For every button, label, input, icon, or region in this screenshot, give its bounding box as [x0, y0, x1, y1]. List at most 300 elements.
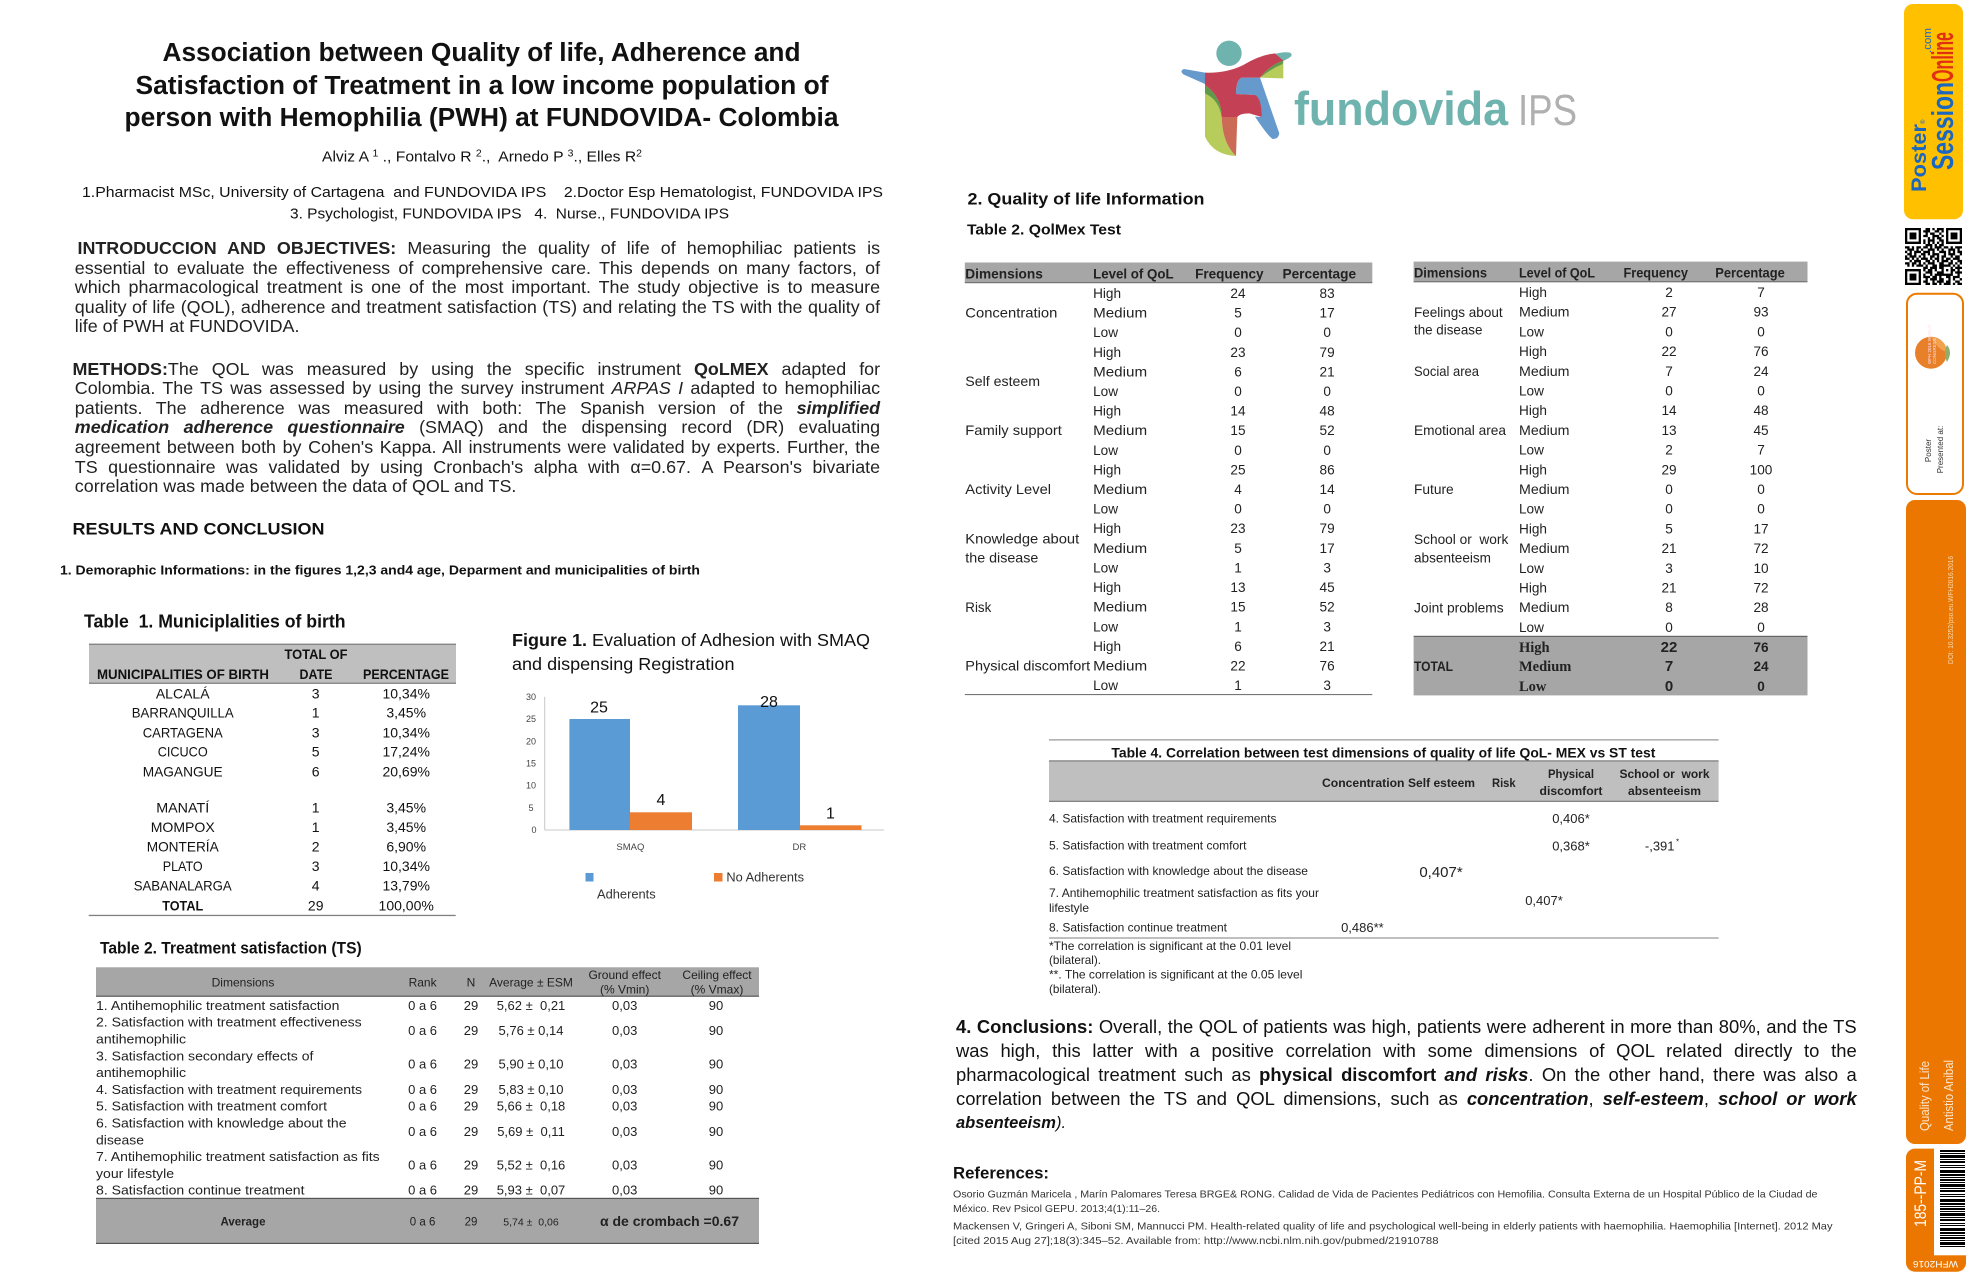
table 4 rows: 0,407* [1525, 893, 1563, 908]
row group: Knowledge about the disease: 23 [1230, 521, 1246, 536]
left table header: Frequency [1195, 266, 1264, 281]
table 2 row values: 5,66 ± 0,18 [497, 1098, 565, 1113]
row group: Future: Medium [1519, 482, 1570, 497]
logo figure [1181, 41, 1292, 156]
table 1 rows: 1 [312, 704, 320, 720]
row group: School or work absenteeism: 21 [1661, 541, 1677, 556]
table 2 row values: 5,52 ± 0,16 [497, 1158, 565, 1173]
row group: Family support [965, 404, 1335, 458]
text block: conclusions: 4. Conclusions: Overall, the QOL of patients was high, patients were adherent in more than 80%, and the TS [956, 1016, 1857, 1037]
table 2 row values: 29 [464, 1182, 478, 1197]
row group: School or work absenteeism: 3 [1665, 561, 1673, 576]
table 2 row values: 29 [464, 1023, 478, 1038]
table 2 row values: 5,62 ± 0,21 [497, 998, 565, 1013]
table 2 average band: α de crombach =0.67 [600, 1214, 739, 1229]
authors: ., Elles R [573, 148, 636, 166]
row group: Knowledge about the disease: 3 [1323, 561, 1331, 576]
total band: 22 [1661, 639, 1677, 656]
row group: Physical discomfort: 6 [1234, 639, 1242, 654]
panel: QoL table right [1414, 262, 1808, 695]
heading: results and conclusion: RESULTS AND CONCLUSION [72, 520, 324, 538]
table 1 header band: DATE [300, 666, 332, 682]
table 4 rows: 4. Satisfaction with treatment requirements [1049, 811, 1276, 825]
sidebar: presented at box [1907, 294, 1963, 494]
row group: Self esteem: 0 [1323, 384, 1331, 399]
total band: Low [1519, 679, 1547, 695]
row group: Family support: High [1093, 404, 1121, 419]
bar value labels: 28 [760, 694, 778, 711]
row group: Risk: Low [1093, 619, 1118, 634]
table 1 rows: 2 [312, 838, 320, 854]
row group: Joint problems: 0 [1757, 620, 1765, 635]
table 2 row values: 90 [709, 1098, 723, 1113]
table 2 header: (% Vmax) [691, 982, 743, 996]
row group: Future: 0 [1665, 482, 1673, 497]
row group: Concentration: 5 [1234, 306, 1242, 321]
left table header [965, 262, 1372, 283]
table 1 rows: PLATO [163, 858, 203, 874]
text block: methods: agreement between both by Cohen's Kappa. All instruments were validated by experts. Further, the [75, 437, 880, 457]
row group: Risk: High [1093, 580, 1121, 595]
row group: Self esteem: 0 [1234, 384, 1242, 399]
table 1 rows: MAGANGUE [143, 763, 223, 779]
row group: Concentration: 17 [1320, 306, 1335, 321]
row group: Emotional area: 45 [1753, 423, 1769, 438]
total band: Medium [1519, 659, 1571, 675]
sidebar: poster id and barcode: 185--PP-M [1911, 1160, 1930, 1227]
table 4 header: Physical [1548, 767, 1594, 781]
row group: School or work absenteeism: 72 [1753, 541, 1769, 556]
row group: Risk: 3 [1323, 619, 1331, 634]
row group: Physical discomfort: 1 [1234, 678, 1242, 693]
row group: Emotional area: Medium [1519, 423, 1570, 438]
row group: Joint problems: 0 [1665, 620, 1673, 635]
bar value labels: 25 [590, 700, 608, 716]
row group: Feelings about the disease: 2 [1665, 285, 1673, 300]
table 2 row values: 0 a 6 [408, 1182, 437, 1197]
row group: Emotional area: Emotional area [1414, 423, 1506, 438]
total band: High [1519, 640, 1550, 656]
figure 1 heading [512, 630, 870, 674]
table 1 rows: 100,00% [379, 897, 434, 913]
y axis labels: 5 [528, 803, 534, 813]
total band [1414, 636, 1808, 695]
affiliations [82, 184, 883, 222]
table 2 average band: 29 [465, 1216, 477, 1228]
table 1 rows: 20,69% [382, 763, 430, 779]
row group: Knowledge about the disease: Knowledge about [965, 532, 1079, 547]
table 1 rows: 6 [312, 763, 320, 779]
row group: Knowledge about the disease [965, 521, 1335, 576]
table 2 row values: 0 a 6 [408, 1158, 437, 1173]
references heading: References: [953, 1164, 1049, 1182]
row group: Joint problems: Medium [1519, 600, 1570, 615]
row group: School or work absenteeism: 10 [1753, 561, 1769, 576]
category labels: DR [793, 842, 806, 853]
table 2 row values: 0,03 [612, 1182, 637, 1197]
table 2 header [96, 967, 759, 997]
table 2 row values: 0,03 [612, 1124, 637, 1139]
table 2 row values: 5,69 ± 0,11 [497, 1124, 565, 1139]
row group: Self esteem: 21 [1320, 364, 1335, 379]
row group: Knowledge about the disease: High [1093, 521, 1121, 536]
table 1 rows: 10,34% [382, 685, 430, 701]
table 4 footnotes: (bilateral). [1049, 953, 1101, 967]
table 1 rows: 17,24% [382, 743, 430, 759]
row group: Activity Level: 4 [1234, 482, 1242, 497]
category labels: SMAQ [616, 842, 644, 853]
row group: Emotional area: 2 [1665, 443, 1673, 458]
authors: 2 [636, 148, 642, 160]
bar value labels: 4 [657, 792, 666, 809]
table 2 row values: 0 a 6 [408, 1124, 437, 1139]
text block: methods: Colombia. The TS was assessed by using the survey instrument ARPAS I adapted to hemophiliac [75, 378, 880, 398]
table 2 average band: 0 a 6 [410, 1216, 435, 1228]
sidebar: PosterSessionOnline banner: .com [1922, 28, 1934, 53]
title [124, 39, 839, 132]
logo wordmark: fundovida [1294, 82, 1509, 135]
row group: Future: 29 [1661, 462, 1677, 477]
table 4 rows: * [1676, 837, 1679, 846]
row group: Future: 0 [1757, 502, 1765, 517]
row group: Emotional area [1414, 403, 1769, 458]
row group: Social area: 0 [1757, 384, 1765, 399]
row group: Concentration: Medium [1093, 306, 1147, 321]
table 2 average band [96, 1198, 759, 1244]
total band: 76 [1753, 640, 1769, 655]
row group: Feelings about the disease: High [1519, 285, 1547, 300]
references list: México. Rev Psicol GEPU. 2013;4(1):11–26. [953, 1203, 1160, 1215]
row group: Knowledge about the disease: Medium [1093, 541, 1147, 556]
row group: Joint problems: 21 [1661, 581, 1677, 596]
row group: Self esteem [965, 345, 1335, 399]
congress badge: WFH 2016 WORLD [1927, 324, 1932, 364]
bars [569, 705, 862, 830]
title: person with Hemophilia (PWH) at FUNDOVIDA- Colombia [124, 104, 839, 132]
row group: Social area: Low [1519, 384, 1544, 399]
chart axes [545, 697, 884, 830]
table 2 row labels: antihemophilic [96, 1065, 187, 1080]
table 2 row labels: 3. Satisfaction secondary effects of [96, 1048, 314, 1063]
table 2 row values: 90 [709, 1023, 723, 1038]
table 4 footnotes: **. The correlation is significant at the 0.05 level [1049, 968, 1302, 982]
text block: conclusions: was high, this latter with a positive correlation with some dimensions of QOL related directly to the [956, 1040, 1857, 1061]
table 1 rows: 10,34% [382, 858, 430, 874]
sidebar [1904, 4, 1966, 1272]
sidebar: poster id and barcode [1906, 1149, 1966, 1272]
text block: methods: TS questionnaire was validated by using Cronbach's alpha with α=0.67. A Pearson's bivariate [75, 457, 880, 477]
table 1 rows: TOTAL [162, 897, 204, 913]
table 2 row values: 29 [464, 1082, 478, 1097]
table heading: QolMex: Table 2. QolMex Test [967, 221, 1121, 238]
table 1 header band: TOTAL OF [284, 646, 348, 662]
row group: School or work absenteeism: Medium [1519, 541, 1570, 556]
sidebar: orange title strip: Quality of Life [1918, 1061, 1932, 1131]
row group: Concentration: Concentration [965, 306, 1057, 321]
row group: Social area [1414, 344, 1769, 398]
row group: Emotional area: 13 [1661, 423, 1677, 438]
presented at label [1924, 426, 1945, 473]
table 4 rows: 5. Satisfaction with treatment comfort [1049, 839, 1247, 853]
row group: Concentration: 83 [1320, 286, 1335, 301]
table 4 header: absenteeism [1628, 784, 1701, 798]
table 2 row labels [96, 998, 380, 1197]
table 2 average band: 5,74 ± 0,06 [503, 1216, 559, 1228]
left table header: Level of QoL [1093, 266, 1174, 281]
row group: Emotional area: 48 [1753, 403, 1769, 418]
text block: methods: METHODS:The QOL was measured by using the specific instrument QoLMEX adapted for [72, 359, 880, 379]
row group: Feelings about the disease [1414, 285, 1769, 339]
table 2 row values: 0 a 6 [408, 1023, 437, 1038]
row group: Joint problems: High [1519, 581, 1547, 596]
table 1 rows: MANATÍ [156, 799, 209, 815]
row group: Concentration: Low [1093, 325, 1118, 340]
row group: Self esteem: Self esteem [965, 374, 1040, 389]
table 4 rows: 0,407* [1419, 864, 1463, 881]
row group: Joint problems [1414, 580, 1769, 635]
row group: Future: Low [1519, 502, 1544, 517]
table 1 rows: 3 [312, 858, 320, 874]
text block: methods: correlation was made between the data of QOL and TS. [75, 476, 516, 496]
authors: 3 [568, 148, 574, 160]
authors: ., Arnedo P [482, 148, 568, 166]
row group: Feelings about the disease: 93 [1753, 305, 1769, 320]
table 4 footnotes: *The correlation is significant at the 0.01 level [1049, 939, 1291, 953]
authors: Alviz A [322, 148, 366, 166]
table 1 rows: 6,90% [386, 838, 426, 854]
table 2 row values: 5,83 ± 0,10 [499, 1082, 563, 1097]
row group: Physical discomfort: Physical discomfort [965, 659, 1090, 674]
table 2 row values: 0 a 6 [408, 1082, 437, 1097]
sidebar: PosterSessionOnline banner: Poster [1908, 124, 1931, 192]
row group: Family support: 0 [1234, 443, 1242, 458]
table 2 header: Average ± ESM [489, 976, 573, 990]
table 1 rows: CICUCO [158, 743, 208, 759]
table 1 rows: 1 [312, 819, 320, 835]
table 1 rows: SABANALARGA [134, 877, 232, 893]
table 2 row labels: 4. Satisfaction with treatment requirements [96, 1082, 363, 1097]
text block: methods: medication adherence questionnaire (SMAQ) and the dispensing record (DR) evaluating [75, 417, 880, 437]
table 1 rows: 1 [312, 799, 320, 815]
category labels [616, 842, 806, 853]
table 1 rows: 3,45% [386, 704, 426, 720]
table 2 row values: 0 a 6 [408, 998, 437, 1013]
table 2 row values: 29 [464, 1158, 478, 1173]
text block: introduction and objectives: essential to evaluate the effectiveness of comprehensive care. This depends on many factors, of [75, 258, 880, 278]
row group: Family support: 48 [1320, 404, 1335, 419]
row group: Knowledge about the disease: Low [1093, 561, 1118, 576]
figure 1 heading: Figure 1. Evaluation of Adhesion with SMAQ [512, 630, 870, 650]
table 4 header: Concentration [1322, 776, 1404, 790]
row group: Family support: Low [1093, 443, 1118, 458]
table 1 rows: 3 [312, 724, 320, 740]
row group: Social area: 76 [1753, 344, 1769, 359]
text block: conclusions: pharmacological treatment such as physical discomfort and risks. On the other hand, there was also a [956, 1064, 1857, 1085]
table 2 row values [408, 998, 723, 1197]
table 4 header [1049, 760, 1719, 802]
row group: Concentration: High [1093, 286, 1121, 301]
table 2 row values: 5,93 ± 0,07 [497, 1182, 565, 1197]
row group: Activity Level: 14 [1320, 482, 1335, 497]
table 2 header: Dimensions [212, 976, 274, 990]
table 2 row values: 29 [464, 1057, 478, 1072]
references list: Osorio Guzmán Maricela , Marín Palomares Teresa BRGE& RONG. Calidad de Vida de Pacientes Pediátricos con Hemofilia. Consulta Externa de un Hospital Público de la Ciudad de [953, 1188, 1818, 1200]
row group: Risk [965, 580, 1335, 634]
text block: introduction and objectives: which pharmacological treatment is one of the most important. The study objective is to measure [75, 277, 880, 297]
row group: Family support: Medium [1093, 423, 1147, 438]
table 1 rows: 3,45% [386, 799, 426, 815]
row group: Future: 100 [1750, 462, 1773, 477]
row group: Social area: 22 [1661, 344, 1677, 359]
row group: Activity Level: Low [1093, 502, 1118, 517]
total band: 0 [1757, 679, 1765, 694]
sidebar: PosterSessionOnline banner [1904, 4, 1963, 219]
row group: Physical discomfort: 22 [1230, 659, 1246, 674]
row group: School or work absenteeism [1414, 521, 1769, 576]
references list: [cited 2015 Aug 27];18(3):345–52. Available from: http://www.ncbi.nlm.nih.gov/pubmed/21910788 [953, 1235, 1439, 1247]
text block: conclusions [956, 1016, 1858, 1132]
row group: Knowledge about the disease: 17 [1320, 541, 1335, 556]
sidebar: QR code [1905, 229, 1962, 284]
row group: Risk: 15 [1230, 600, 1246, 615]
y axis labels: 10 [526, 780, 536, 790]
table 2 row values: 29 [464, 1098, 478, 1113]
references list: Mackensen V, Gringeri A, Siboni SM, Mannucci PM. Health-related quality of life and psychological well-being in elderly patients with haemophilia. Haemophilia [Internet]. 2012 May [953, 1221, 1833, 1233]
presented at label: Poster [1924, 439, 1933, 462]
row group: Future: High [1519, 462, 1547, 477]
table 2 row labels: your lifestyle [96, 1166, 174, 1181]
row group: Activity Level: 0 [1323, 502, 1331, 517]
table 2 row values: 29 [464, 1124, 478, 1139]
row group: Family support: 0 [1323, 443, 1331, 458]
panel: table 2 treatment satisfaction [96, 938, 759, 1244]
table 4 rows: 0,406* [1552, 811, 1590, 826]
row group: Self esteem: 23 [1230, 345, 1246, 360]
row group: Risk: 45 [1320, 580, 1335, 595]
table 1 rows: 29 [308, 897, 324, 913]
table 4 header: discomfort [1540, 784, 1602, 798]
legend: No Adherents [726, 870, 804, 884]
table 2 row labels: 2. Satisfaction with treatment effectiveness [96, 1014, 362, 1029]
table 1 rows: CARTAGENA [143, 724, 223, 740]
table 1 header band: PERCENTAGE [363, 666, 449, 682]
left table header: Dimensions [965, 266, 1043, 281]
table 4 header: Self esteem [1408, 776, 1475, 790]
row group: Risk: Risk [965, 600, 991, 615]
row group: Self esteem: Medium [1093, 364, 1147, 379]
row group: Social area: 24 [1753, 364, 1769, 379]
row group: Joint problems: Low [1519, 620, 1544, 635]
row group: Self esteem: High [1093, 345, 1121, 360]
right table header: Frequency [1623, 265, 1688, 280]
row group: Emotional area: Low [1519, 443, 1544, 458]
row group: Risk: 52 [1320, 600, 1335, 615]
row group: Feelings about the disease: Low [1519, 324, 1544, 339]
table 2 row values: 90 [709, 1182, 723, 1197]
table 4 footnotes [1049, 939, 1302, 996]
y axis labels: 25 [526, 714, 536, 724]
right table header: Level of QoL [1519, 265, 1595, 280]
table 2 row values: 90 [709, 1057, 723, 1072]
table 4 rows: 7. Antihemophilic treatment satisfaction as fits your [1049, 886, 1319, 900]
table 1 rows: 3 [312, 685, 320, 701]
y axis labels: 0 [531, 825, 537, 835]
row group: Activity Level: 0 [1234, 502, 1242, 517]
row group: Joint problems: 8 [1665, 600, 1673, 615]
table 2 row labels: disease [96, 1132, 144, 1147]
table 2 row labels: antihemophilic [96, 1031, 187, 1046]
row group: Activity Level: 25 [1230, 462, 1246, 477]
row group: School or work absenteeism: 5 [1665, 521, 1673, 536]
table 4 title: Table 4. Correlation between test dimensions of quality of life QoL- MEX vs ST test [1111, 745, 1656, 760]
row group: Family support: 15 [1230, 423, 1246, 438]
table 2 heading: Table 2. Treatment satisfaction (TS) [100, 938, 362, 958]
row group: Social area: 0 [1665, 384, 1673, 399]
authors: ., Fontalvo R [378, 148, 476, 166]
left table header: Percentage [1282, 266, 1357, 281]
text block: conclusions: correlation between the TS and QOL dimensions, such as concentration, self-esteem, school or work [956, 1088, 1857, 1109]
row group: Joint problems: Joint problems [1414, 600, 1504, 615]
row group: School or work absenteeism: 17 [1753, 521, 1769, 536]
affiliations: 3. Psychologist, FUNDOVIDA IPS 4. Nurse., FUNDOVIDA IPS [290, 206, 729, 222]
sidebar: poster id and barcode: WFH2016 [1913, 1258, 1958, 1269]
row group: Social area: Medium [1519, 364, 1570, 379]
table 2 row labels: 6. Satisfaction with knowledge about the [96, 1115, 346, 1130]
table 4 rows: 0,368* [1552, 838, 1590, 853]
row group: Family support: Family support [965, 423, 1062, 438]
congress badge: CONGRESS [1932, 338, 1937, 364]
subheading: demographic information: 1. Demoraphic Informations: in the figures 1,2,3 and4 age, Deparment and municipalities of birth [60, 562, 700, 578]
table 2 row labels: 1. Antihemophilic treatment satisfaction [96, 998, 339, 1013]
y axis labels [526, 692, 537, 835]
sidebar: PosterSessionOnline banner: ® [1920, 119, 1927, 124]
row group: Activity Level: 86 [1320, 462, 1335, 477]
table 1 rows: BARRANQUILLA [132, 704, 234, 720]
row group: Risk: 1 [1234, 619, 1242, 634]
row group: Physical discomfort [965, 639, 1372, 695]
table 2 row values: 0,03 [612, 1082, 637, 1097]
table 4 header: Risk [1492, 776, 1516, 790]
bar value labels [590, 694, 835, 822]
row group: Activity Level: High [1093, 462, 1121, 477]
presented at label: Presented at: [1936, 426, 1945, 473]
row group: Social area: High [1519, 344, 1547, 359]
legend [586, 870, 804, 902]
text block: methods: patients. The adherence was measured with both: The Spanish version of the simplified [75, 398, 880, 418]
row group: Activity Level [965, 462, 1335, 517]
title: Association between Quality of life, Adherence and [162, 39, 800, 67]
panel: table 4 correlation [1049, 739, 1719, 996]
title: Satisfaction of Treatment in a low income population of [136, 72, 829, 100]
authors: 1 [373, 148, 379, 160]
table 1 header band: MUNICIPALITIES OF BIRTH [97, 666, 269, 682]
y axis labels: 30 [526, 692, 536, 702]
right table header: Dimensions [1414, 265, 1487, 280]
right table header: Percentage [1715, 265, 1785, 280]
table 2 row labels: 8. Satisfaction continue treatment [96, 1182, 305, 1197]
row group: Emotional area: 14 [1661, 403, 1677, 418]
row group: Knowledge about the disease: the disease [965, 550, 1038, 565]
row group: Self esteem: 79 [1320, 345, 1335, 360]
table 2 average band: Average [221, 1216, 265, 1228]
sidebar: PosterSessionOnline banner: Session [1925, 82, 1960, 170]
table 2 row values: 0 a 6 [408, 1098, 437, 1113]
row group: Physical discomfort: 3 [1323, 678, 1331, 693]
row group: Family support: 14 [1230, 404, 1246, 419]
table 2 row values: 0,03 [612, 1098, 637, 1113]
table 4 rows: 8. Satisfaction continue treatment [1049, 920, 1228, 934]
row group: Concentration: 0 [1323, 325, 1331, 340]
